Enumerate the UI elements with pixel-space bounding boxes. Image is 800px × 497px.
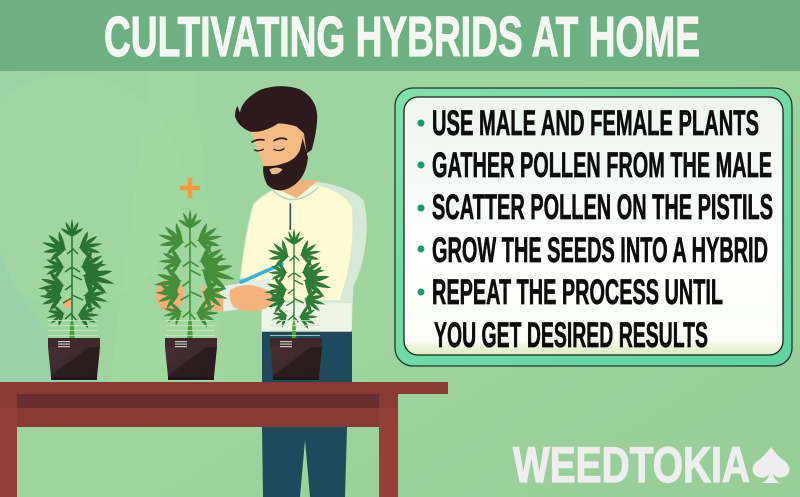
table [0,382,448,497]
man: beard [263,138,308,190]
man: eyes and brows [252,138,287,151]
man: left hand [156,278,184,312]
logo [513,437,790,493]
panel: steps [395,88,792,366]
man: right arm hand [200,285,278,312]
header band [0,0,800,71]
pipette [241,264,282,282]
man: neck and head [252,117,318,198]
plant: right [262,228,336,380]
panel frame [395,88,792,366]
bullets [418,120,424,296]
plant: middle [152,209,240,380]
plant: left [36,219,120,380]
man: trousers [262,330,352,497]
man [156,86,367,497]
man: shirt [220,182,367,332]
panel card [404,97,783,355]
background light shapes [0,71,225,385]
steps text [432,104,773,355]
icon: spade [752,447,790,483]
man: mouth [269,168,283,174]
plus sign [180,178,200,198]
man: hair [235,86,317,153]
